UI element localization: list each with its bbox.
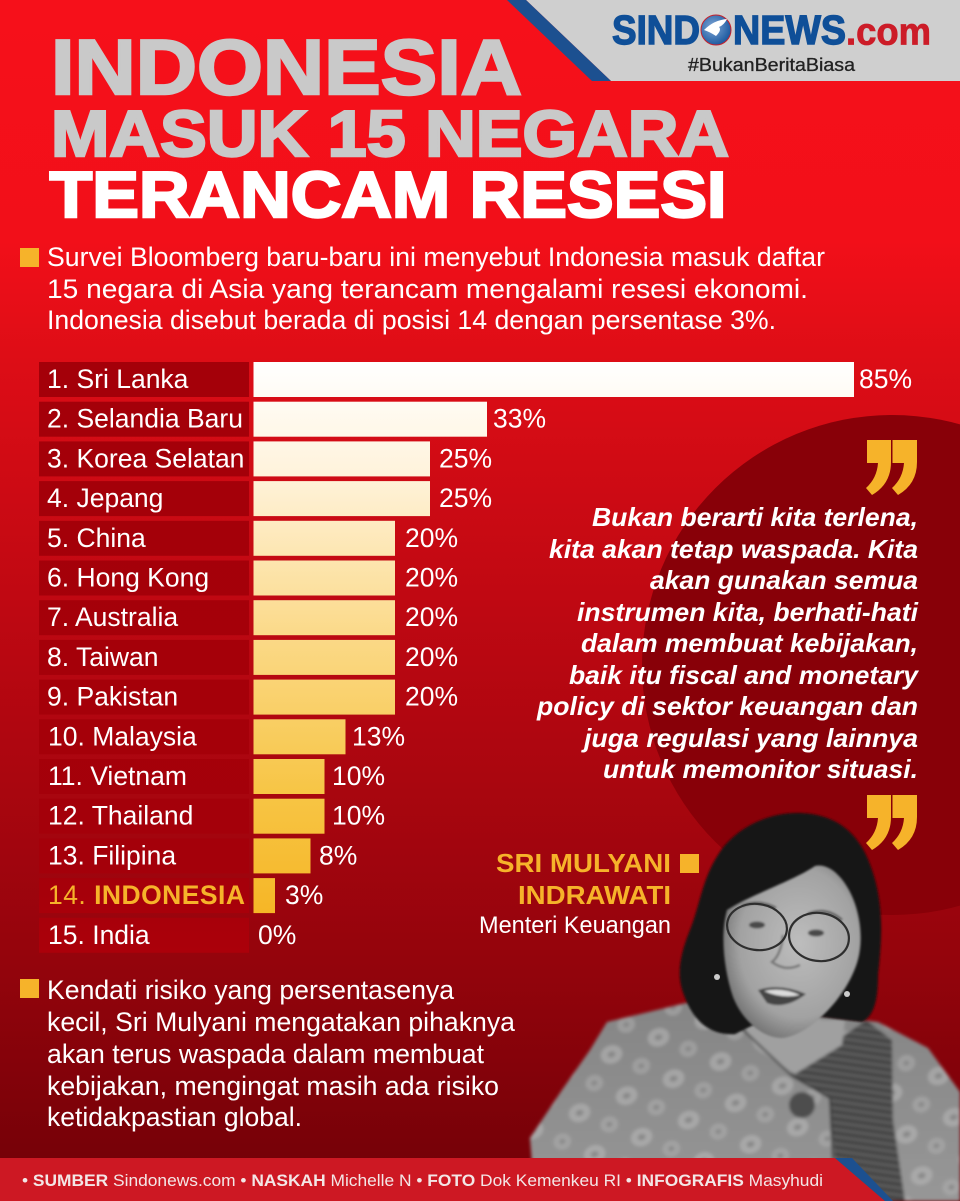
row 4: 4. Jepang (47, 483, 163, 513)
logo: SINDONEWS.com: .com (846, 12, 931, 54)
hair (680, 813, 881, 1034)
row 8 (39, 640, 458, 675)
row 2 (39, 402, 546, 437)
earrings (714, 974, 720, 980)
speaker name: SRI MULYANI (496, 848, 671, 878)
nose (772, 935, 800, 968)
intro text block (20, 242, 825, 335)
face (723, 865, 861, 1038)
title (50, 23, 729, 231)
footer band (0, 1158, 893, 1201)
lapel shadow (738, 1025, 833, 1160)
collar stripes (790, 1020, 905, 1201)
row 6: 6. Hong Kong (47, 562, 209, 592)
closing text block: ketidakpastian global. (47, 1102, 302, 1132)
row 2: 2. Selandia Baru (47, 404, 243, 434)
row 1: 85% (859, 364, 912, 394)
header logo band (507, 0, 960, 81)
button (789, 1092, 815, 1118)
row 6 (39, 560, 458, 596)
portrait of Sri Mulyani (530, 813, 960, 1201)
intro text block: Survei Bloomberg baru-baru ini menyebut Indonesia masuk daftar (47, 242, 825, 272)
speaker name: Menteri Keuangan (479, 912, 671, 939)
row 14: 14. INDONESIA (48, 880, 245, 910)
logo: SINDONEWS.com (612, 7, 931, 54)
glasses (724, 900, 852, 965)
row 2: 33% (493, 404, 546, 434)
closing text block: Kendati risiko yang persentasenya (47, 975, 454, 1005)
bar chart (39, 362, 912, 953)
row 10: 13% (352, 721, 405, 751)
quote text block: policy di sektor keuangan dan (536, 691, 918, 721)
row 5 (39, 521, 458, 556)
row 11 (39, 759, 385, 794)
row 5: 20% (405, 523, 458, 553)
row 13 (39, 838, 357, 873)
row 15 (39, 918, 296, 953)
row 7: 20% (405, 602, 458, 632)
intro text block: 15 negara di Asia yang terancam mengalami resesi ekonomi. (47, 274, 808, 304)
row 14: 3% (285, 880, 323, 910)
quote text block: kita akan tetap waspada. Kita (549, 534, 918, 564)
quote text block: Bukan berarti kita terlena, (592, 502, 918, 532)
quote text block: juga regulasi yang lainnya (581, 723, 918, 753)
quote text block: akan gunakan semua (650, 565, 918, 595)
icon: opening quote mark (866, 440, 917, 495)
row 13: 13. Filipina (48, 840, 176, 870)
closing text block: kecil, Sri Mulyani mengatakan pihaknya (47, 1007, 515, 1037)
row 9 (39, 680, 458, 715)
row 8: 8. Taiwan (47, 642, 158, 672)
row 3: 25% (439, 443, 492, 473)
logo: SINDONEWS.com: SIND (612, 7, 700, 53)
closing text block: kebijakan, mengingat masih ada risiko (47, 1071, 499, 1101)
row 10 (39, 719, 405, 754)
row 10: 10. Malaysia (48, 721, 197, 751)
quote text block: dalam membuat kebijakan, (581, 628, 918, 658)
row 9: 9. Pakistan (47, 682, 178, 712)
row 5: 5. China (47, 523, 146, 553)
row 3 (39, 441, 492, 476)
row 12: 12. Thailand (48, 801, 193, 831)
row 1 (39, 362, 912, 397)
quote text block: instrumen kita, berhati-hati (577, 597, 919, 627)
eyebrows (742, 903, 776, 908)
mouth (758, 987, 806, 1005)
quote background circle (642, 415, 960, 915)
row 9: 20% (405, 682, 458, 712)
closing text block: akan terus waspada dalam membuat (47, 1039, 485, 1069)
row 7 (39, 600, 458, 635)
quote text block (536, 440, 920, 850)
neck (742, 1020, 845, 1074)
title: MASUK 15 NEGARA (51, 97, 729, 170)
row 15: 15. India (48, 920, 150, 950)
row 13: 8% (319, 840, 357, 870)
row 1: 1. Sri Lanka (47, 364, 189, 394)
row 12 (39, 799, 385, 834)
hashtag: #BukanBeritaBiasa (688, 55, 856, 75)
speaker name: INDRAWATI (518, 880, 671, 910)
eyes (749, 922, 765, 928)
row 12: 10% (332, 801, 385, 831)
intro text block: Indonesia disebut berada di posisi 14 dengan persentase 3%. (47, 305, 776, 335)
row 15: 0% (258, 920, 296, 950)
title: INDONESIA (51, 23, 522, 111)
blouse (530, 1002, 960, 1201)
row 6: 20% (405, 562, 458, 592)
closing text block (20, 975, 515, 1132)
icon: closing quote mark (866, 795, 917, 850)
row 4: 25% (439, 483, 492, 513)
row 4 (39, 481, 492, 516)
title: TERANCAM RESESI (50, 158, 726, 231)
quote text block: baik itu fiscal and monetary (569, 660, 920, 690)
credits: • SUMBER Sindonews.com • NASKAH Michelle N • FOTO Dok Kemenkeu RI • INFOGRAFIS Masyhudi (22, 1171, 823, 1190)
row 11: 10% (332, 761, 385, 791)
logo: SINDONEWS.com: NEWS (733, 7, 846, 53)
row 14 (39, 878, 323, 913)
row 8: 20% (405, 642, 458, 672)
row 7: 7. Australia (47, 602, 178, 632)
row 3: 3. Korea Selatan (47, 443, 244, 473)
row 11: 11. Vietnam (48, 761, 187, 791)
speaker name (479, 848, 699, 939)
quote text block: untuk memonitor situasi. (603, 754, 918, 784)
